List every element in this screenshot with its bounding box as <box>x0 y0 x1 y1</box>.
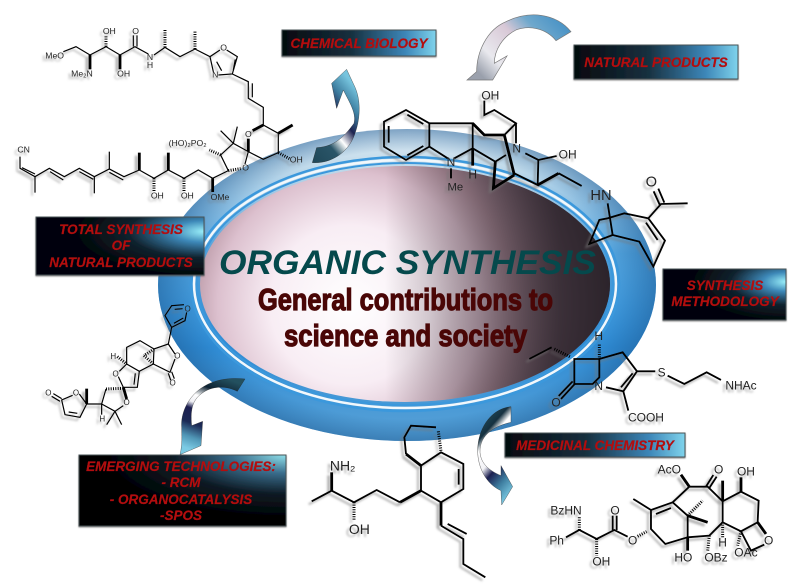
molecule: furan spiro lactone: O <box>185 304 191 313</box>
arrow: to medicinal chemistry <box>478 407 513 505</box>
label: emerging technologies: - RCM <box>162 475 201 490</box>
molecule: top-left polyketide: (HO)₂PO₂ <box>169 138 207 148</box>
molecule: indole alkaloid <box>384 88 582 194</box>
label: total synthesis of natural products <box>36 217 204 275</box>
molecule: furan spiro lactone: O <box>174 352 180 361</box>
molecule: bridged aza-tricycle with acetyl <box>589 175 688 267</box>
molecule: carbapenem: N <box>594 379 603 393</box>
molecule: furan spiro lactone <box>45 304 191 425</box>
arrow: to chemical biology <box>312 69 359 163</box>
label: emerging technologies: - ORGANOCATALYSIS <box>110 492 252 507</box>
molecule: carbapenem: NHAc <box>725 378 757 392</box>
molecule: taxol: OAc <box>734 546 758 560</box>
molecule: bridged aza-tricycle with acetyl: O <box>646 175 657 191</box>
label: emerging technologies: EMERGING TECHNOLOGIES: <box>86 459 276 474</box>
molecule: indole alkaloid: N <box>447 155 455 169</box>
molecule: indole alkaloid: Me <box>447 182 463 194</box>
molecule: carbapenem: O <box>551 396 561 410</box>
subtitle line 1: General contributions to <box>258 282 553 317</box>
molecule: indole alkaloid: OH <box>559 147 577 161</box>
molecule: carbapenem: S <box>658 366 666 380</box>
molecule: carbapenem <box>529 329 757 425</box>
molecule: top-left polyketide: N <box>212 69 218 79</box>
central ellipse badge <box>158 129 656 441</box>
molecule: top-left polyketide: OH <box>181 191 194 201</box>
molecule: top-left polyketide: O <box>242 163 249 173</box>
arrow: from natural products <box>467 15 571 80</box>
molecule: bottom amino alcohol: OH <box>349 521 370 537</box>
label: emerging technologies <box>79 455 286 526</box>
molecule: carbapenem: H <box>594 329 603 343</box>
label: chemical biology <box>282 30 436 56</box>
molecule: top-left polyketide: MeO <box>45 51 64 61</box>
molecule: top-left polyketide: OMe <box>211 192 230 202</box>
molecule: taxol: O <box>628 533 637 547</box>
molecule: indole alkaloid: N <box>512 142 521 156</box>
molecule: top-left polyketide: OH <box>290 155 303 165</box>
molecule: taxol: BzHN <box>550 504 582 518</box>
molecule: taxol: OH <box>592 555 610 569</box>
molecule: taxol: O <box>714 462 723 476</box>
molecule: top-left polyketide: H <box>147 60 153 70</box>
molecule: indole alkaloid: H <box>468 167 477 181</box>
label: total synthesis of natural products: TOTAL SYNTHESIS <box>59 222 183 237</box>
molecule: furan spiro lactone: O <box>45 389 51 398</box>
molecule: furan spiro lactone: H <box>110 352 116 361</box>
molecule: furan spiro lactone: H <box>99 415 105 424</box>
molecule: top-left polyketide: O <box>245 129 252 139</box>
label: synthesis methodology: SYNTHESIS <box>687 278 763 293</box>
label: emerging technologies: -SPOS <box>160 508 202 523</box>
molecule: top-left polyketide: OH <box>117 69 130 79</box>
label: synthesis methodology: METHODOLOGY <box>671 294 781 309</box>
molecule: taxol: H <box>718 536 727 550</box>
molecule: taxol: O <box>764 533 773 547</box>
molecule: taxol <box>549 462 773 569</box>
molecule: bridged aza-tricycle with acetyl: HN <box>590 188 612 204</box>
label: natural products <box>574 45 738 79</box>
label: total synthesis of natural products: OF <box>112 238 131 253</box>
label: medicinal chemistry <box>505 433 685 457</box>
molecule: indole alkaloid: OH <box>481 88 499 102</box>
arrow: to emerging technologies <box>180 378 245 455</box>
label: total synthesis of natural products: NATURAL PRODUCTS <box>49 255 193 270</box>
title: organic synthesis: ORGANIC SYNTHESIS <box>219 244 596 282</box>
molecule: taxol: AcO <box>658 462 681 476</box>
label: chemical biology: CHEMICAL BIOLOGY <box>290 36 429 51</box>
label: natural products: NATURAL PRODUCTS <box>584 55 728 70</box>
molecule: top-left polyketide: Me₂N <box>71 69 93 79</box>
molecule: bottom amino alcohol <box>312 426 485 577</box>
molecule: top-left polyketide: OH <box>151 191 164 201</box>
molecule: furan spiro lactone: O <box>113 370 119 379</box>
label: medicinal chemistry: MEDICINAL CHEMISTRY <box>516 438 676 453</box>
molecule: carbapenem: COOH <box>628 411 664 425</box>
molecule: top-left polyketide: OH <box>103 26 116 36</box>
molecule: top-left polyketide <box>17 26 303 202</box>
subtitle line 2: science and society <box>284 318 528 353</box>
molecule: taxol: OBz <box>704 551 728 565</box>
molecule: furan spiro lactone: O <box>73 389 79 398</box>
molecule: top-left polyketide: CN <box>17 145 30 155</box>
molecule: furan spiro lactone: O <box>124 398 130 407</box>
molecule: furan spiro lactone: O <box>170 379 176 388</box>
molecule: taxol: Ph <box>549 533 564 547</box>
molecule: top-left polyketide: O <box>220 43 227 53</box>
molecule: taxol: O <box>610 503 620 517</box>
molecule: taxol: OH <box>737 464 755 478</box>
label: synthesis methodology <box>663 269 786 320</box>
molecule: top-left polyketide: N <box>147 52 153 62</box>
molecule: top-left polyketide: O <box>132 26 139 36</box>
molecule: bottom amino alcohol: NH₂ <box>330 458 355 474</box>
molecule: taxol: HO <box>674 551 692 565</box>
